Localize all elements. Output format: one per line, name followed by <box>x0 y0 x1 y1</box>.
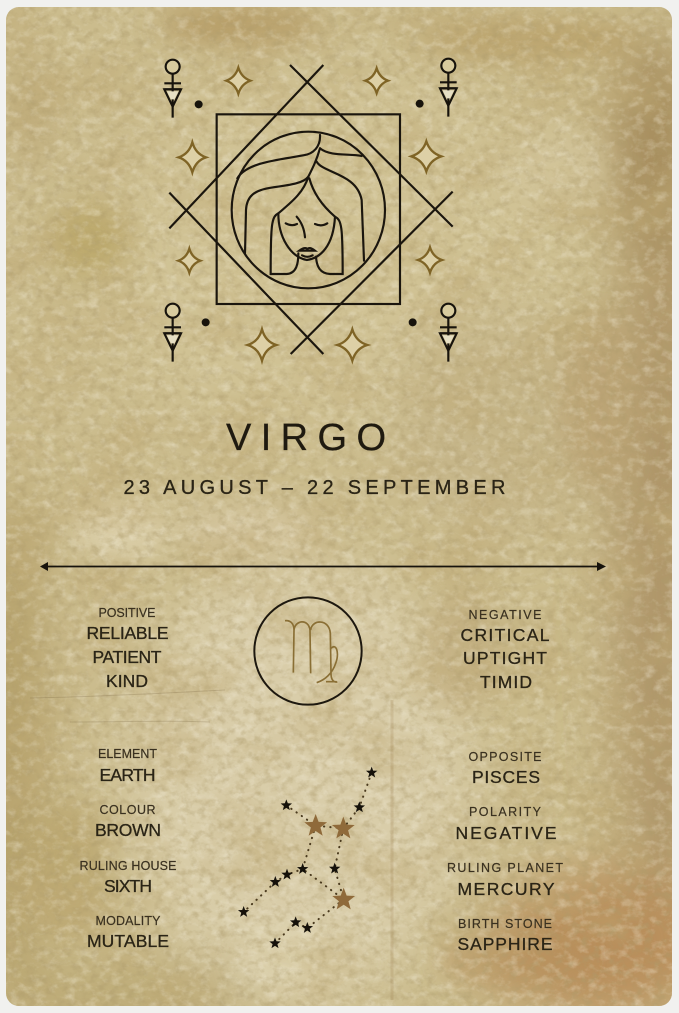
panel: positive traits: POSITIVE <box>98 606 156 620</box>
panel: positive traits: PATIENT <box>92 647 162 667</box>
panel: left attributes: ELEMENT <box>98 747 157 761</box>
panel: right attributes: PISCES <box>472 767 540 787</box>
panel: left attributes: MUTABLE <box>87 931 169 951</box>
panel: right attributes: RULING PLANET <box>447 861 563 875</box>
panel: right attributes: POLARITY <box>469 805 542 819</box>
panel: right attributes: BIRTH STONE <box>458 917 552 931</box>
panel: right attributes: MERCURY <box>458 879 555 899</box>
brown stars <box>304 814 355 909</box>
gold sparkle stars <box>178 68 442 361</box>
constellation dotted lines <box>244 773 372 943</box>
panel: left attributes: BROWN <box>95 820 161 840</box>
pendant icons <box>164 59 457 362</box>
constellation <box>238 767 377 948</box>
panel: left attributes: RULING HOUSE <box>80 859 176 873</box>
icon: virgo glyph in circle <box>254 597 362 705</box>
panel: negative traits: TIMID <box>480 672 532 692</box>
title: VIRGO <box>226 417 386 459</box>
panel: left attributes: EARTH <box>100 765 156 785</box>
panel: negative traits: UPTIGHT <box>463 648 547 668</box>
panel: left attributes: SIXTH <box>104 876 152 896</box>
panel: positive traits: RELIABLE <box>86 623 168 643</box>
black dots <box>195 100 424 326</box>
panel: right attributes: OPPOSITE <box>468 750 542 764</box>
panel: left attributes <box>80 747 176 951</box>
panel: positive traits <box>86 606 168 691</box>
panel: right attributes: NEGATIVE <box>456 823 556 843</box>
panel: right attributes <box>447 750 563 954</box>
date range: 23 AUGUST – 22 SEPTEMBER <box>124 477 506 499</box>
black stars <box>238 767 377 948</box>
panel: left attributes: COLOUR <box>100 803 156 817</box>
zodiac emblem <box>164 59 457 362</box>
panel: positive traits: KIND <box>106 671 148 691</box>
panel: right attributes: SAPPHIRE <box>458 934 552 954</box>
double arrow divider <box>40 562 606 571</box>
panel: negative traits: CRITICAL <box>460 625 550 645</box>
panel: negative traits: NEGATIVE <box>468 608 542 622</box>
panel: left attributes: MODALITY <box>96 914 161 928</box>
panel: negative traits <box>460 608 550 692</box>
emblem frame: square and crossed diamond <box>169 65 453 354</box>
maiden portrait in circle <box>232 132 385 288</box>
